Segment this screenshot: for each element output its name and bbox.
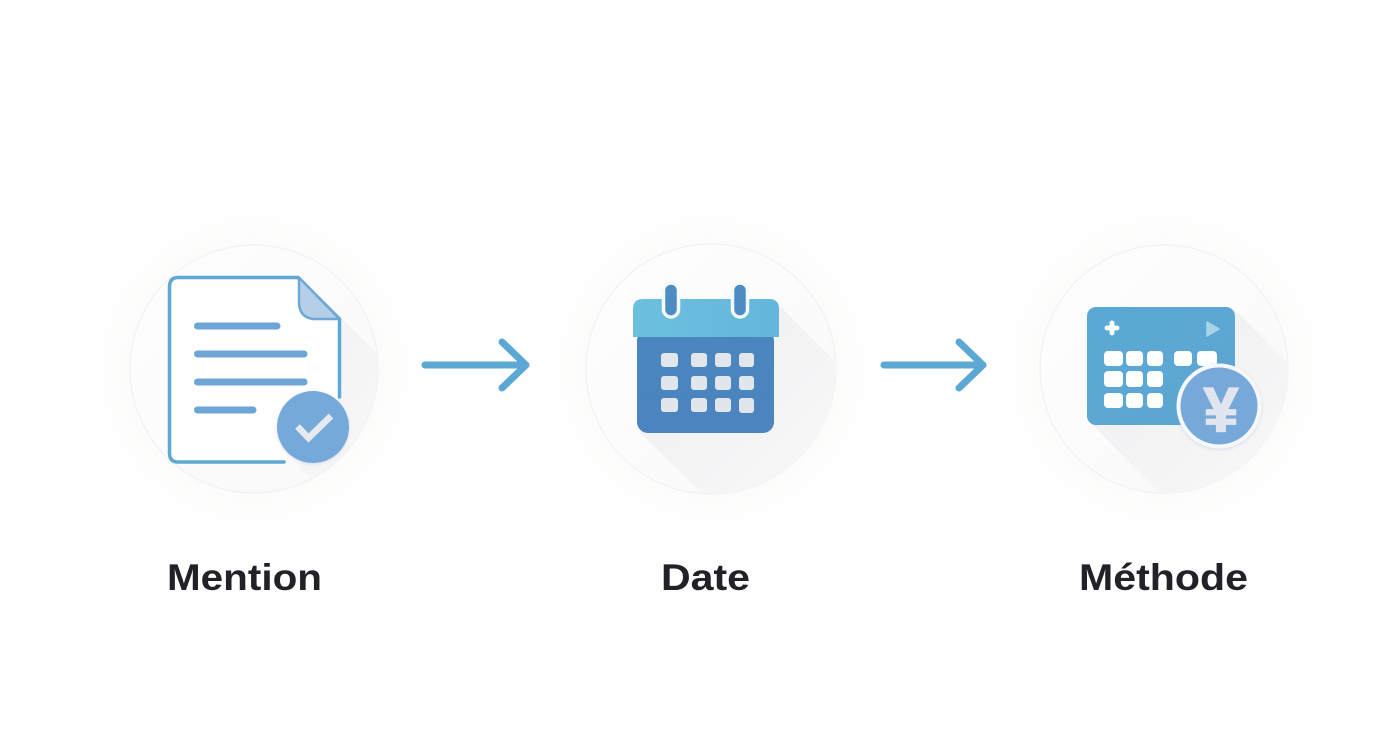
heading: Méthode: Méthode <box>1079 557 1248 598</box>
icon background circle: méthode <box>1040 244 1288 494</box>
arrow: date to méthode <box>884 342 983 388</box>
icon: calendar <box>633 283 779 433</box>
panel: méthode step <box>1040 244 1288 590</box>
icon: yen coin: ¥ <box>1204 376 1239 445</box>
icon background circle: date <box>586 244 836 494</box>
icon: payment card calendar <box>1087 307 1260 446</box>
heading: Mention: Mention <box>167 557 322 598</box>
panel: date step <box>586 244 836 590</box>
icon: document with check badge <box>170 278 349 463</box>
panel: mention step <box>130 244 378 590</box>
icon background circle: mention <box>130 244 378 494</box>
heading: Date: Date <box>661 557 750 598</box>
arrow: mention to date <box>425 342 526 388</box>
icon: yen coin <box>1178 366 1260 446</box>
